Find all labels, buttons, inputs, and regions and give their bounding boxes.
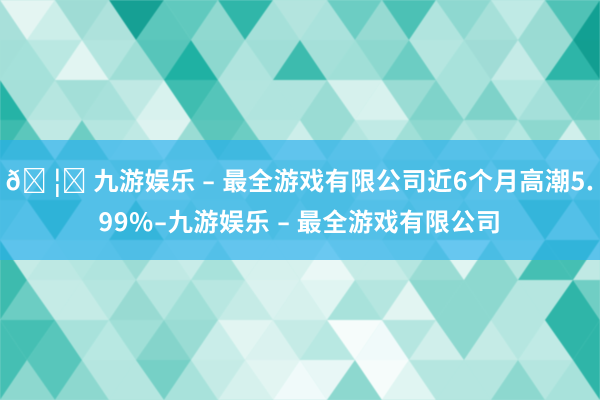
title: - xyxy=(202,162,217,198)
title: 99% 九游娱乐 最全游戏有限公司 xyxy=(98,203,502,239)
title: - xyxy=(276,203,291,239)
blue title band xyxy=(0,140,600,260)
title xyxy=(5,162,595,239)
title: ð ¦ 九游娱乐 最全游戏有限公司近6个月高潮5. xyxy=(5,162,595,198)
title: - xyxy=(153,203,168,239)
